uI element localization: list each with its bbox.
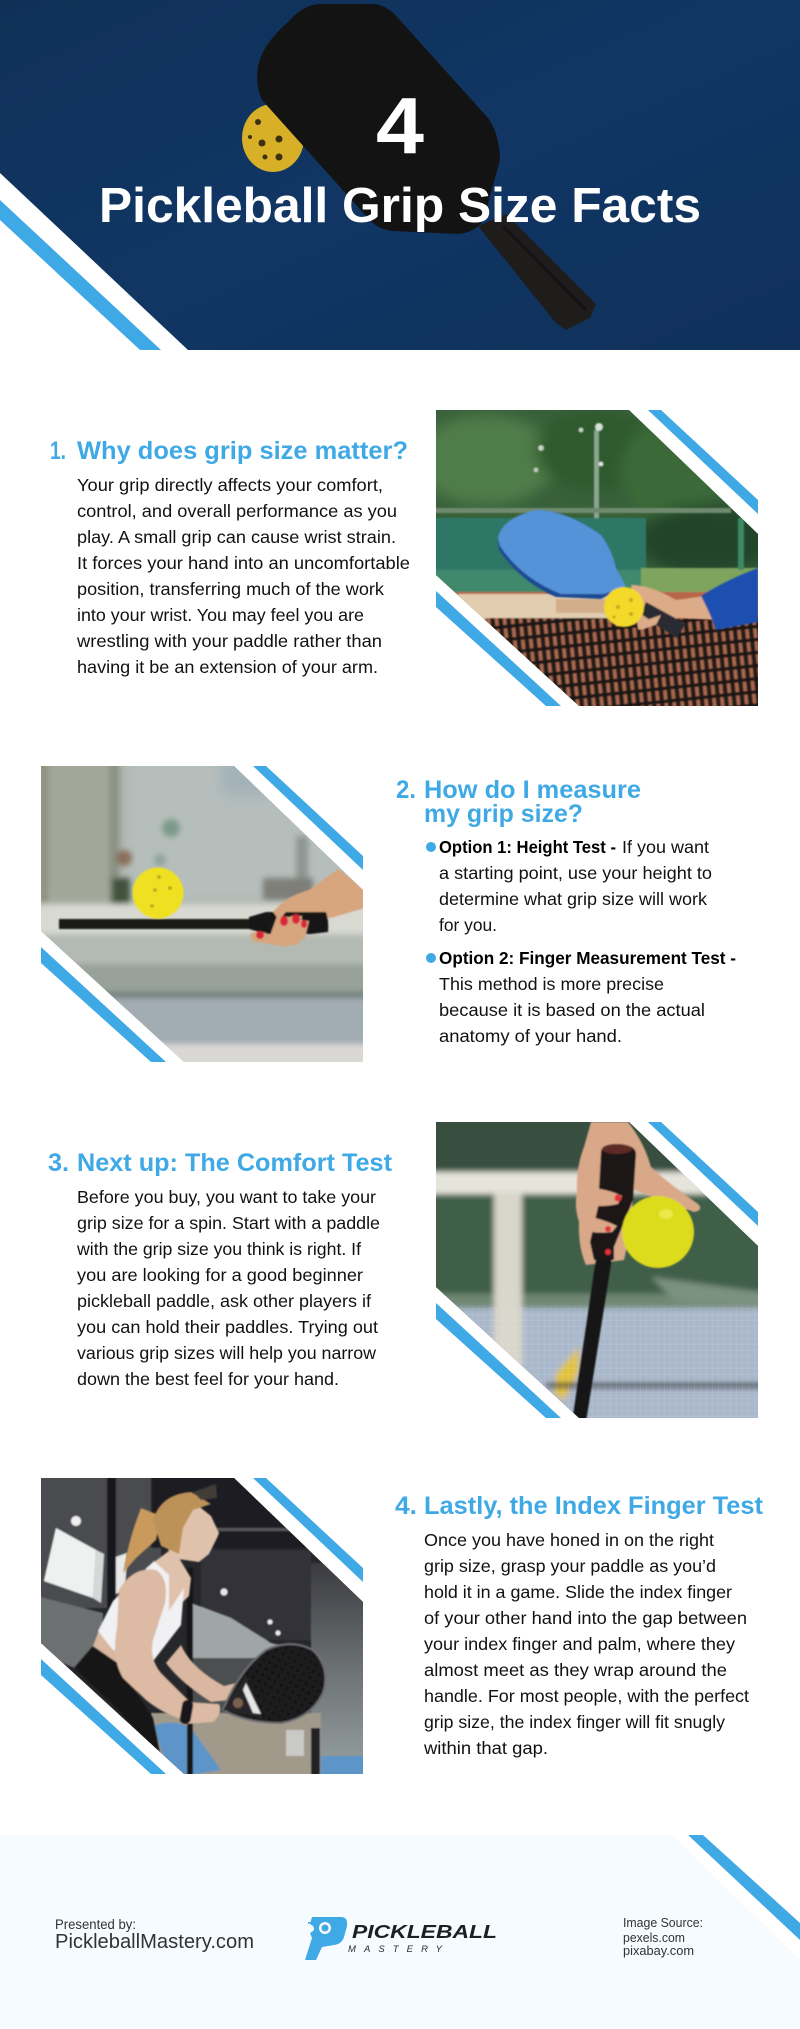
body text 1: position, transferring much of the work	[77, 579, 384, 599]
bullet: option 2: because it is based on the actual	[439, 1000, 705, 1020]
presented by: PickleballMastery.com	[55, 1931, 254, 1953]
stripe: upper right	[253, 766, 363, 870]
body text 3: pickleball paddle, ask other players if	[77, 1291, 371, 1311]
body text 1: control, and overall performance as you	[77, 501, 397, 521]
fingers	[272, 911, 286, 918]
image source: pixabay.com	[623, 1944, 694, 1958]
body text 3: you can hold their paddles. Trying out	[77, 1317, 378, 1337]
bullet: option 1: for you.	[439, 915, 497, 935]
body text 4: almost meet as they wrap around the	[424, 1660, 727, 1680]
heading 4: 4.	[395, 1492, 417, 1520]
logo wordmark: PICKLEBALL	[352, 1922, 497, 1942]
heading 2	[396, 776, 641, 828]
body text 4: your index finger and palm, where they	[424, 1634, 735, 1654]
presented by: Presented by:	[55, 1917, 136, 1932]
stripe: lower left	[41, 1659, 166, 1774]
image source: Image Source:	[623, 1916, 703, 1930]
body text 4: grip size, the index finger will fit snugly	[424, 1712, 725, 1732]
body text 4: within that gap.	[423, 1738, 548, 1758]
heading 3: Next up: The Comfort Test	[77, 1149, 393, 1177]
woman figure	[74, 1484, 236, 1758]
footer blue stripe	[688, 1835, 800, 1940]
heading 2: 2.	[396, 776, 416, 804]
stripe: upper right	[253, 1478, 363, 1582]
header corner blue stripe	[0, 200, 161, 350]
body text 4: hold it in a game. Slide the index finger	[424, 1582, 732, 1602]
panel: footer	[0, 1835, 800, 2029]
hand, grip and ball	[572, 1122, 700, 1422]
body text 4: Once you have honed in on the right	[424, 1530, 714, 1550]
grip	[249, 912, 328, 934]
image source: pexels.com	[623, 1931, 685, 1945]
footer background	[0, 1835, 800, 2029]
panel: section 2 text	[396, 776, 736, 1046]
body text 1: into your wrist. You may feel you are	[77, 605, 364, 625]
body text 3: Before you buy, you want to take your	[77, 1187, 376, 1207]
body text 3: down the best feel for your hand.	[77, 1369, 339, 1389]
photo: ball balanced on paddle edge	[41, 766, 363, 1062]
body text 1: having it be an extension of your arm.	[77, 657, 378, 677]
bullet: option 2: This method is more precise	[439, 974, 664, 994]
panel: section 2 photo	[41, 766, 363, 1062]
body text 3: you are looking for a good beginner	[77, 1265, 363, 1285]
photo: woman holding padel racket	[36, 1473, 368, 1779]
paddle edge	[59, 919, 254, 929]
heading 3: 3.	[48, 1149, 69, 1177]
bullet: option 2: Option 2: Finger Measurement Test -	[439, 948, 736, 968]
title: Pickleball Grip Size Facts	[99, 179, 701, 233]
bullet: option 2: anatomy of your hand.	[439, 1026, 622, 1046]
body text 1: Your grip directly affects your comfort,	[77, 475, 383, 495]
body text 1: It forces your hand into an uncomfortable	[77, 553, 410, 573]
body text 1	[76, 475, 410, 677]
bullet: option 1: a starting point, use your height to	[439, 863, 712, 883]
bullet: option 2	[426, 948, 736, 1046]
stripe: lower left	[436, 591, 561, 706]
stripe: lower left	[41, 947, 166, 1062]
ball	[59, 868, 371, 947]
photo: blue paddle and ball over net	[436, 410, 758, 706]
panel: header	[0, 0, 800, 350]
logo	[305, 1917, 497, 1960]
heading 1: Why does grip size matter?	[77, 437, 408, 465]
logo icon	[305, 1917, 347, 1960]
panel: section 4 text	[395, 1492, 764, 1758]
body text 3	[76, 1187, 380, 1389]
photo: hand gripping handle with ball	[436, 1122, 758, 1418]
panel: section 1 photo	[436, 410, 758, 706]
heading 4: Lastly, the Index Finger Test	[424, 1492, 764, 1520]
body text 4: handle. For most people, with the perfect	[424, 1686, 749, 1706]
panel: section 4 photo	[36, 1473, 368, 1779]
body text 1: play. A small grip can cause wrist strain.	[77, 527, 396, 547]
bullet: option 1: If you want	[622, 837, 709, 857]
body text 4: of your other hand into the gap between	[424, 1608, 747, 1628]
bullet: option 1	[426, 837, 712, 935]
panel: section 3 text	[48, 1149, 393, 1389]
body text 3: with the grip size you think is right. If	[76, 1239, 361, 1259]
header photo: paddle and ball on navy court	[0, 0, 800, 350]
title number: 4	[376, 81, 425, 170]
stripe: lower left	[436, 1303, 561, 1418]
heading 1: 1.	[50, 437, 66, 465]
heading 2: my grip size?	[424, 800, 583, 828]
heading 2: How do I measure	[424, 776, 641, 804]
blue paddle	[498, 510, 758, 638]
logo subline: MASTERY	[348, 1944, 443, 1955]
stripe: upper right	[648, 410, 758, 514]
body text 4	[423, 1530, 749, 1758]
forearm	[273, 869, 371, 918]
header corner white band	[0, 173, 188, 350]
body text 3: grip size for a spin. Start with a paddle	[77, 1213, 380, 1233]
stripe: upper right	[648, 1122, 758, 1226]
bullet: option 1: determine what grip size will work	[439, 889, 707, 909]
bullet: option 1: Option 1: Height Test -	[439, 837, 616, 857]
body text 4: grip size, grasp your paddle as you’d	[424, 1556, 716, 1576]
racket	[223, 1644, 325, 1723]
panel: section 1 text	[50, 437, 410, 677]
body text 1: wrestling with your paddle rather than	[76, 631, 382, 651]
body text 3: various grip sizes will help you narrow	[77, 1343, 376, 1363]
image source	[623, 1916, 703, 1958]
presented by	[55, 1917, 254, 1953]
panel: section 3 photo	[436, 1122, 758, 1418]
